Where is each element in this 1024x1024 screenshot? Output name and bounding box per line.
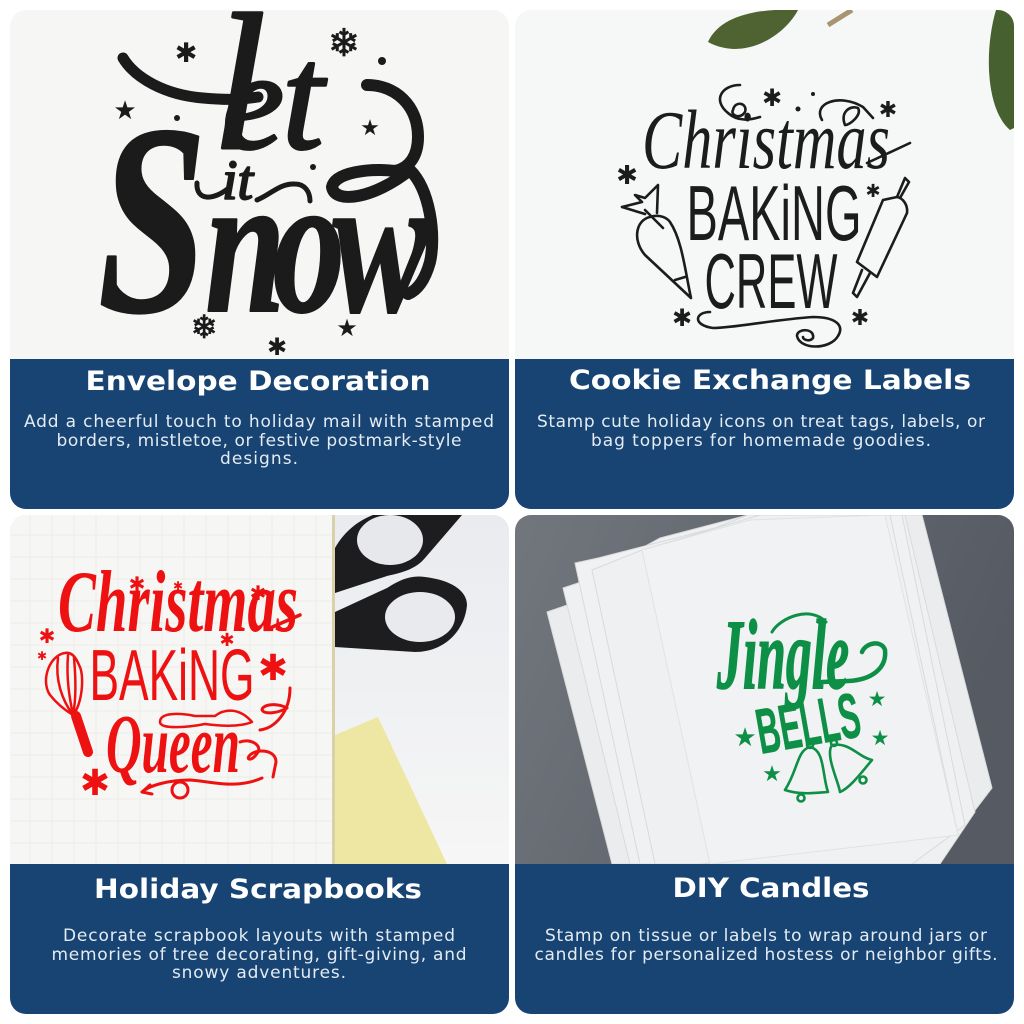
heading: DIY Candles [672,873,870,904]
photo: christmas baking crew stamp with leaves: ✱ [616,161,638,191]
stamp lettering: snow: o [273,133,345,355]
icons: piping bag, rolling pin and flourishes [622,85,910,346]
photo: christmas baking queen stamp on grid paper with scissors [10,515,509,864]
stamp lettering: christmas baking queen: ✱ [258,648,288,689]
stamp lettering: snow: w [333,133,429,355]
heading: Holiday Scrapbooks [94,874,422,905]
stamp lettering: christmas baking crew [645,110,888,309]
body text: borders, mistletoe, or festive postmark-style [56,431,462,451]
panel: DIY candles [515,515,1014,1014]
caption panel [515,864,1014,1014]
stamp lettering: christmas baking queen: ✱ [173,579,183,593]
grid paper [10,515,332,648]
body text: Stamp cute holiday icons on treat tags, labels, or [537,412,985,432]
icons: whisk and rolling pin [46,615,300,798]
decorations: stars and snowflakes: ★ [336,314,358,342]
photo: jingle bells stamp on paper stack: ★ [868,687,886,711]
panel: envelope decoration [10,0,509,509]
decorations: stars and snowflakes: ✱ [175,38,197,69]
stamp lettering: christmas baking queen: Queen [106,698,240,791]
stamp lettering: let: t [282,15,327,181]
scissors [335,515,467,652]
stamp lettering: snow: S [98,70,207,371]
stamp lettering: jingle bells: BELLS [751,679,866,768]
heading: Cookie Exchange Labels [569,365,971,396]
panel: cookie exchange labels [515,10,1014,509]
photo: christmas baking crew stamp with leaves: ✱ [762,84,782,112]
decorations: stars and snowflakes: ❄ [328,21,360,65]
body text: memories of tree decorating, gift-giving, and [52,945,466,965]
decorations: stars and snowflakes: ✱ [267,333,287,361]
flourishes [123,58,432,294]
body text: designs. [220,449,298,469]
stamp lettering: christmas baking queen: ✱ [37,649,47,663]
photo: jingle bells stamp on paper stack [515,515,1014,864]
photo: christmas baking crew stamp with leaves [515,10,1014,359]
stamp lettering: christmas baking queen: ✱ [129,572,145,596]
photo: let it snow stamp on white paper [10,0,509,371]
stamp lettering: christmas baking queen: ✱ [250,581,266,605]
stamp lettering: christmas baking crew: CREW [704,237,838,325]
stamp lettering: christmas baking queen [38,570,296,795]
stamp lettering: christmas baking queen: Christmas [58,554,298,651]
photo: christmas baking crew stamp with leaves: ✱ [879,98,897,123]
icons: bells, flourishes and stars [772,614,885,802]
caption panel [10,864,509,1014]
photo: christmas baking crew stamp with leaves: ✱ [672,304,692,332]
caption panel [10,359,509,509]
stamp lettering: christmas baking crew: Christmas [642,94,890,187]
stamp lettering: snow: n [205,133,285,355]
body text: Add a cheerful touch to holiday mail with stamped [24,412,494,432]
decorations: stars and snowflakes [113,21,386,361]
body text: bag toppers for homemade goodies. [591,431,931,451]
photo: christmas baking crew stamp with leaves: ✱ [865,181,881,202]
caption panel [515,359,1014,509]
stamp lettering: jingle bells [716,618,860,754]
sticky note [335,717,447,864]
stamp lettering: christmas baking queen: ✱ [219,630,235,651]
body text: Decorate scrapbook layouts with stamped [63,926,455,946]
photo: christmas baking crew stamp with leaves: ✱ [851,306,869,331]
body text: candles for personalized hostess or neighbor gifts. [534,945,998,965]
body text: Stamp on tissue or labels to wrap around jars or [545,926,987,946]
stamp lettering: jingle bells: Jingle [716,599,849,710]
heading: Envelope Decoration [86,366,430,397]
decorations: stars and snowflakes: ★ [113,96,137,126]
panel: holiday scrapbooks [10,515,509,1014]
stamp lettering: christmas baking queen: ✱ [80,763,110,804]
photo: jingle bells stamp on paper stack: ★ [762,762,782,787]
photo: jingle bells stamp on paper stack: ★ [733,723,757,753]
stamp lettering: it: it [222,150,255,212]
decorations: stars and snowflakes: ❄ [191,308,217,346]
paper stack [547,515,992,864]
stamp lettering: christmas baking crew: BAKiNG [686,169,862,257]
body text: snowy adventures. [172,963,346,983]
photo: jingle bells stamp on paper stack: ★ [871,726,889,750]
stamp lettering: let: e [222,24,284,179]
stamp lettering: christmas baking queen: BAKiNG [90,636,254,716]
leaves [708,10,798,49]
decorations: stars and snowflakes: ★ [360,116,380,141]
stamp lettering: christmas baking queen: ✱ [39,624,55,648]
